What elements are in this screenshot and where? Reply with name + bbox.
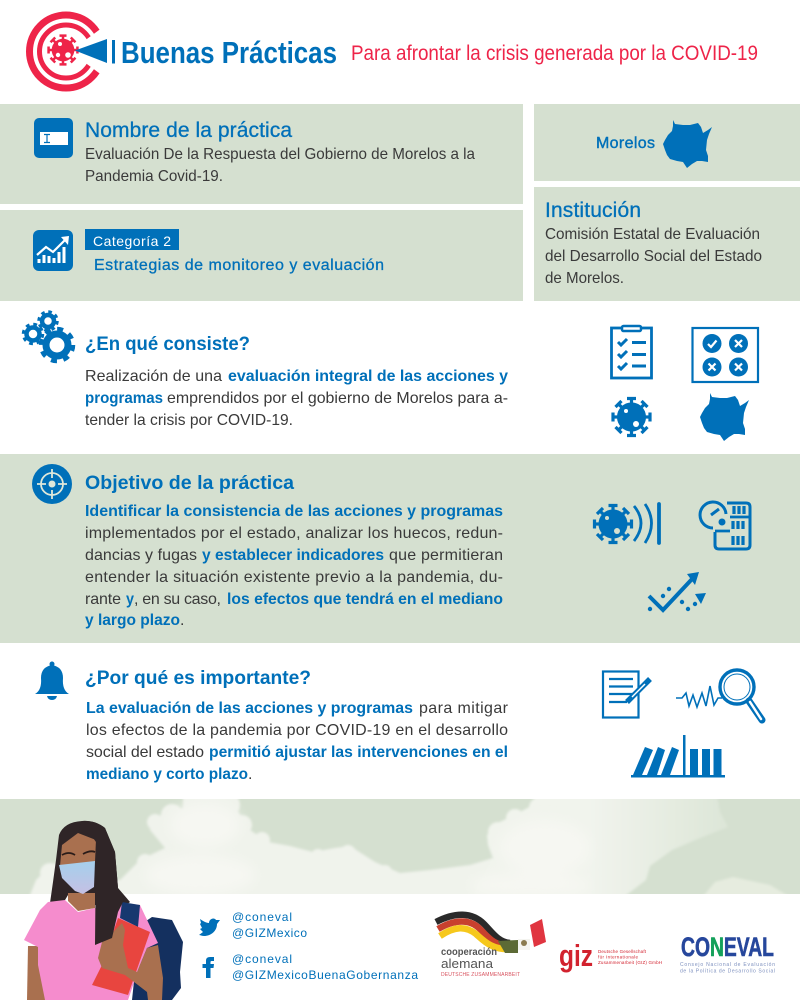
institution name: del Desarrollo Social del Estado	[545, 248, 762, 265]
icon: document and pencil	[603, 672, 650, 718]
importance text: para mitigar	[419, 700, 509, 717]
heading: Objetivo de la práctica	[85, 472, 294, 494]
strap	[120, 902, 140, 927]
importance text: .	[248, 766, 252, 783]
category name: Estrategias de monitoreo y evaluación	[94, 257, 384, 274]
importance text: permitió ajustar las intervenciones en el	[209, 744, 508, 761]
heading: Institución	[545, 199, 641, 222]
icon: virus	[613, 398, 650, 436]
importance text	[86, 700, 509, 783]
band: sky with clouds	[0, 799, 800, 894]
icon: map of Morelos	[700, 393, 749, 441]
state label: Morelos	[596, 135, 655, 152]
section: en qué consiste	[24, 312, 758, 441]
facebook handles	[232, 952, 418, 982]
objective text: .	[180, 612, 184, 629]
objective text	[85, 503, 503, 629]
hand and forearm	[98, 923, 163, 1000]
icon: check and cross grid	[692, 328, 758, 382]
objective text: Identificar la consistencia de las acciones y programas	[85, 503, 503, 520]
description text: emprendidos por el gobierno de Morelos para a-	[167, 390, 508, 407]
logo: coneval: CONEVAL	[681, 932, 774, 962]
objective text: , en su caso,	[134, 591, 221, 608]
panel: nombre de la práctica	[0, 104, 523, 204]
institution name: de Morelos.	[545, 270, 624, 287]
icon: check with trend arrows	[648, 572, 706, 611]
icon: gauge and data server	[700, 502, 750, 549]
objective text: los efectos que tendrá en el mediano	[227, 591, 503, 608]
panel: categoría	[0, 210, 523, 301]
hair front	[78, 821, 124, 945]
heading: ¿En qué consiste?	[85, 333, 250, 355]
icon: virus with waves	[594, 504, 659, 543]
objective text: y	[126, 591, 134, 608]
logo: coneval: Consejo Nacional de Evaluación	[680, 962, 775, 968]
neck	[68, 893, 95, 911]
logo: giz: für Internationale	[598, 954, 638, 960]
panel: estado	[534, 104, 800, 181]
icon: map of Morelos	[663, 120, 712, 168]
mask	[59, 861, 95, 894]
twitter handles: @GIZMexico	[232, 926, 307, 940]
icon: rising chart	[33, 230, 73, 271]
icon: twitter	[199, 919, 220, 936]
description text: Realización de una	[85, 368, 222, 385]
book	[92, 918, 150, 995]
icon: gears	[24, 312, 73, 361]
institution name	[545, 226, 762, 287]
shirt	[24, 900, 158, 1000]
logo: cooperación alemana	[436, 915, 546, 978]
left arm	[27, 946, 47, 1000]
importance text: los efectos de la pandemia por COVID-19 en el desarrollo	[86, 722, 508, 739]
practice name text	[85, 146, 475, 185]
objective text: que permitieran	[389, 547, 503, 564]
icon: magnifier over signal	[676, 670, 762, 720]
description text: evaluación integral de las acciones y	[228, 368, 508, 385]
header logo: target with virus and megaphone	[30, 15, 118, 88]
face	[60, 833, 96, 866]
logo: coneval	[680, 932, 775, 974]
facebook handles: @GIZMexicoBuenaGobernanza	[232, 968, 418, 982]
objective text: y largo plazo	[85, 612, 180, 629]
category badge	[85, 229, 179, 250]
icon: bell	[35, 662, 69, 700]
icon: target	[32, 464, 72, 504]
subtitle: Para afrontar la crisis generada por la COVID-19	[351, 42, 758, 65]
heading: Nombre de la práctica	[85, 119, 292, 142]
section: objetivo	[0, 454, 800, 643]
description text: tender la crisis por COVID-19.	[85, 412, 293, 429]
description text: programas	[85, 390, 163, 407]
section: por qué es importante	[35, 662, 762, 783]
backpack	[132, 917, 183, 1000]
objective text: dancias y fugas	[85, 547, 197, 564]
category badge: Categoría 2	[93, 233, 171, 249]
facebook handles: @coneval	[232, 952, 292, 966]
title: Buenas Prácticas	[121, 35, 337, 70]
logo: cooperación alemana: cooperación	[441, 947, 497, 958]
panel: institución	[534, 187, 800, 301]
twitter handles: @coneval	[232, 910, 292, 924]
importance text: La evaluación de las acciones y programas	[86, 700, 413, 717]
practice name text: Evaluación De la Respuesta del Gobierno de Morelos a la	[85, 146, 475, 163]
heading: ¿Por qué es importante?	[85, 667, 311, 689]
logo: cooperación alemana: DEUTSCHE ZUSAMMENARBEIT	[441, 972, 520, 978]
logo: giz: giz	[559, 938, 593, 973]
footer: student photo illustration	[24, 821, 183, 1000]
logo: cooperación alemana: alemana	[441, 956, 494, 971]
logo: coneval: de la Política de Desarrollo Social	[680, 968, 775, 974]
logo: giz	[559, 938, 662, 973]
hair back	[50, 821, 130, 912]
icon: checklist	[612, 326, 652, 378]
practice name text: Pandemia Covid-19.	[85, 168, 223, 185]
description text	[85, 368, 508, 429]
logo: giz: Zusammenarbeit (GIZ) GmbH	[598, 960, 662, 965]
icon: facebook	[202, 957, 214, 978]
icon: leaning bars	[631, 735, 725, 778]
importance text: mediano y corto plazo	[86, 766, 248, 783]
twitter handles	[232, 910, 307, 940]
institution name: Comisión Estatal de Evaluación	[545, 226, 760, 243]
objective text: entender la situación existente previo a la pandemia, du-	[85, 569, 503, 586]
icon: text field	[34, 118, 73, 158]
logo: giz: Deutsche Gesellschaft	[598, 949, 647, 954]
objective text: implementados por el estado, analizar los huecos, redun-	[85, 525, 503, 542]
objective text: y establecer indicadores	[202, 547, 384, 564]
objective text: rante	[85, 591, 121, 608]
importance text: social del estado	[86, 744, 204, 761]
